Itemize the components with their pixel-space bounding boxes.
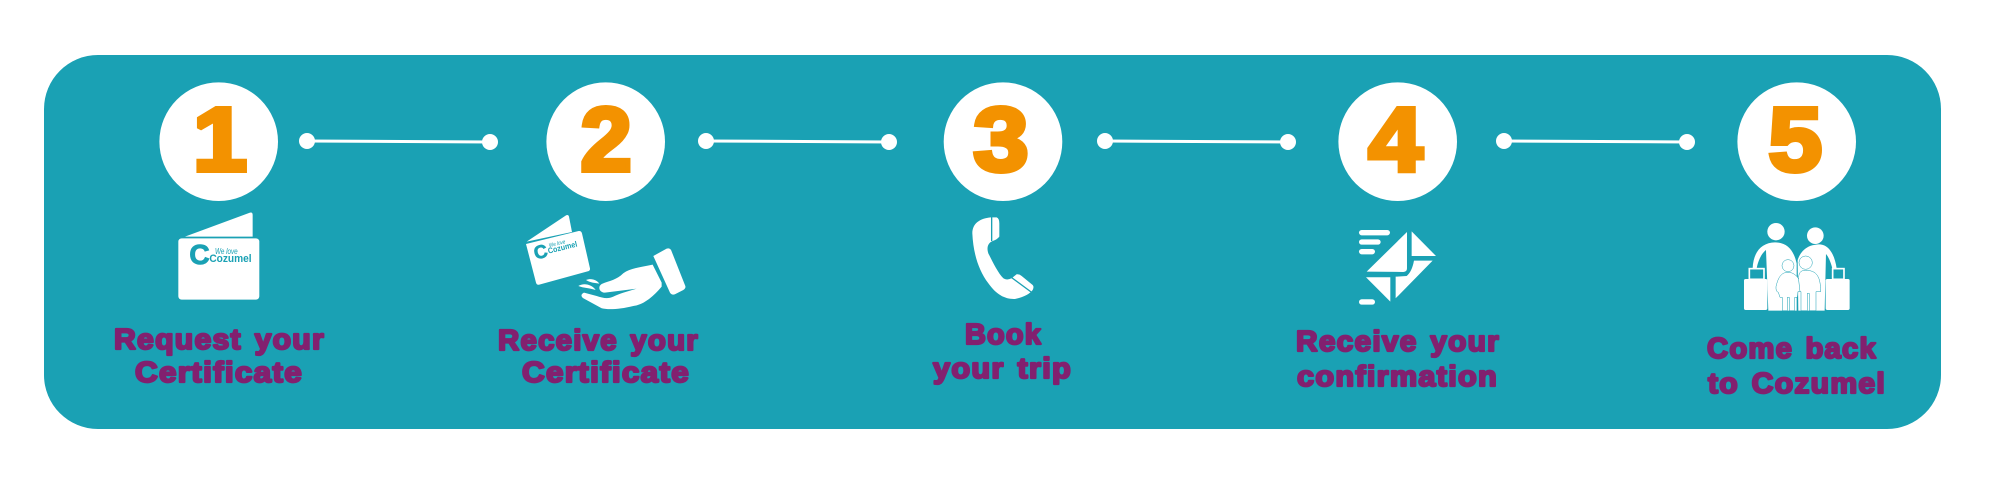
icon: family with suitcases	[1744, 223, 1850, 311]
label: Receive your Certificate: Certificate	[522, 357, 690, 389]
connector 2 to 3	[698, 133, 897, 150]
label: Request your Certificate: Request your	[114, 324, 325, 356]
number badge 3: 3	[974, 90, 1028, 190]
connector 4 to 5	[1496, 133, 1695, 150]
label: Come back to Cozumel: to Cozumel	[1708, 368, 1886, 400]
number badge 1	[159, 82, 278, 201]
number badge 2: 2	[581, 90, 632, 190]
step 5	[1707, 82, 1886, 400]
icon: hand receiving certificate: We love	[548, 239, 566, 249]
icon: hand receiving certificate: C	[532, 240, 550, 264]
label: Request your Certificate: Certificate	[135, 357, 303, 389]
icon: telephone handset	[972, 217, 1033, 299]
connector 3 to 4	[1097, 133, 1296, 150]
number badge 4	[1338, 82, 1457, 201]
label: Receive your confirmation: Receive your	[1296, 326, 1500, 358]
icon: envelope with speed lines	[1359, 230, 1436, 305]
number badge 4: 4	[1368, 90, 1422, 190]
connector 1 to 2	[299, 133, 498, 150]
step 3	[933, 82, 1072, 385]
label: Come back to Cozumel	[1707, 333, 1886, 400]
label: Book your trip: your trip	[933, 353, 1072, 385]
icon: hand receiving certificate: Cozumel	[547, 240, 578, 256]
label: Book your trip	[933, 319, 1072, 385]
icon: certificate booklet	[178, 213, 259, 300]
label: Receive your confirmation: confirmation	[1297, 361, 1498, 393]
label: Receive your Certificate	[498, 325, 699, 389]
label: Receive your confirmation	[1296, 326, 1500, 393]
step 4	[1296, 82, 1500, 393]
number badge 2	[546, 82, 665, 201]
icon: certificate booklet: Cozumel	[209, 253, 252, 265]
number badge 1: 1	[193, 90, 247, 190]
icon: certificate booklet: We love	[215, 246, 238, 256]
label: Request your Certificate	[114, 324, 325, 389]
label: Come back to Cozumel: Come back	[1707, 333, 1877, 365]
number badge 3	[944, 82, 1062, 201]
label: Receive your Certificate: Receive your	[498, 325, 699, 357]
step 2	[498, 82, 699, 389]
step 1	[114, 82, 325, 389]
label: Book your trip: Book	[965, 319, 1042, 351]
icon: hand receiving certificate	[526, 215, 685, 309]
panel: teal background	[44, 55, 1941, 429]
number badge 5: 5	[1768, 90, 1822, 190]
icon: certificate booklet: C	[189, 239, 210, 270]
number badge 5	[1737, 82, 1856, 201]
